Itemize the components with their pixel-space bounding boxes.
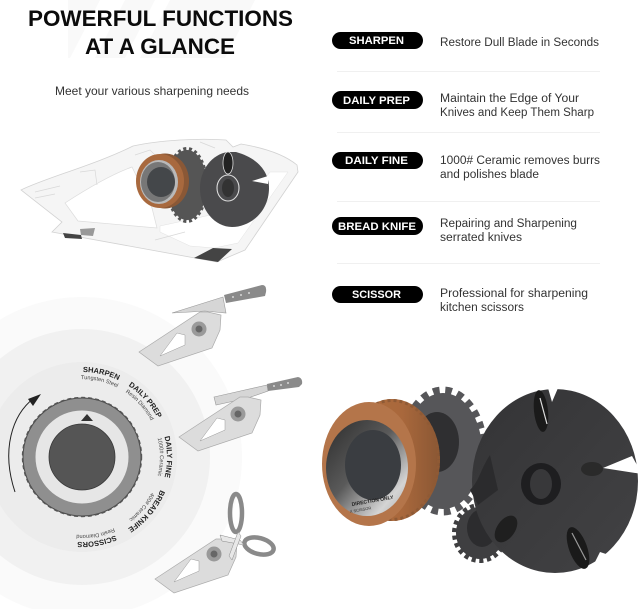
brown knob: DIRECTION ONLY <box>351 495 395 508</box>
row: daily prep <box>332 91 594 119</box>
label: daily fine <box>158 436 172 478</box>
transparent sharpener illustration <box>21 139 298 262</box>
brown knob: X SCISSOR <box>349 505 372 514</box>
row: bread knife: Repairing and Sharpening <box>440 218 577 230</box>
subtitle: Meet your various sharpening needs <box>55 84 249 98</box>
dial <box>22 398 142 516</box>
gear assembly illustration <box>322 388 640 573</box>
feature list <box>332 32 600 314</box>
row: sharpen <box>332 32 599 49</box>
knob <box>141 154 189 208</box>
label: daily prep: DAILY PREP <box>128 382 162 417</box>
disc <box>200 152 269 227</box>
row: scissor: kitchen scissors <box>440 302 524 314</box>
label: scissors: Resin Diamond <box>76 528 115 539</box>
rotation arrow <box>9 394 41 492</box>
label: sharpen: Tungsten Steel <box>81 375 118 388</box>
row: daily prep: DAILY PREP <box>343 95 410 107</box>
row: daily prep: Maintain the Edge of Your <box>440 93 579 105</box>
dial labels <box>76 366 172 548</box>
row: daily fine <box>332 152 600 181</box>
row: scissor <box>332 286 588 314</box>
row: daily fine: DAILY FINE <box>345 155 408 167</box>
body window <box>65 167 157 228</box>
slotted disc <box>470 388 640 573</box>
transparent body <box>21 139 298 262</box>
knife on sharpener 2 <box>179 377 302 451</box>
row: bread knife: serrated knives <box>440 232 522 244</box>
scissors on sharpener <box>155 494 276 593</box>
row: bread knife: BREAD KNIFE <box>338 221 416 233</box>
brown knob <box>322 399 440 526</box>
label: sharpen <box>81 366 120 388</box>
small gear <box>455 506 505 560</box>
title: POWERFUL FUNCTIONS <box>28 6 293 31</box>
label: bread knife: BREAD KNIFE <box>128 490 165 533</box>
title <box>28 6 293 59</box>
title watermark <box>68 0 255 58</box>
clear feet <box>63 233 82 239</box>
label: daily fine: 1000# Ceramic <box>158 438 164 476</box>
row: daily prep: Knives and Keep Them Sharp <box>440 107 594 119</box>
label: scissors <box>76 528 116 548</box>
label: sharpen: SHARPEN <box>83 366 120 380</box>
row: daily fine: and polishes blade <box>440 169 539 181</box>
row: scissor: Professional for sharpening <box>440 288 588 300</box>
title: AT A GLANCE <box>85 34 235 59</box>
label: bread knife: 400# Ceramic <box>130 493 154 521</box>
gear <box>167 150 207 220</box>
row: sharpen: SHARPEN <box>349 35 404 47</box>
row: scissor: SCISSOR <box>352 289 401 301</box>
knife on sharpener 1 <box>139 285 266 366</box>
background circles <box>0 297 242 609</box>
row: sharpen: Restore Dull Blade in Seconds <box>440 37 599 49</box>
row: bread knife <box>332 217 577 244</box>
row: daily fine: 1000# Ceramic removes burrs <box>440 155 600 167</box>
label: daily prep: Resin Diamond <box>126 390 154 420</box>
label: scissors: SCISSORS <box>78 536 116 548</box>
large gear <box>403 391 483 511</box>
label: daily fine: DAILY FINE <box>164 436 172 478</box>
